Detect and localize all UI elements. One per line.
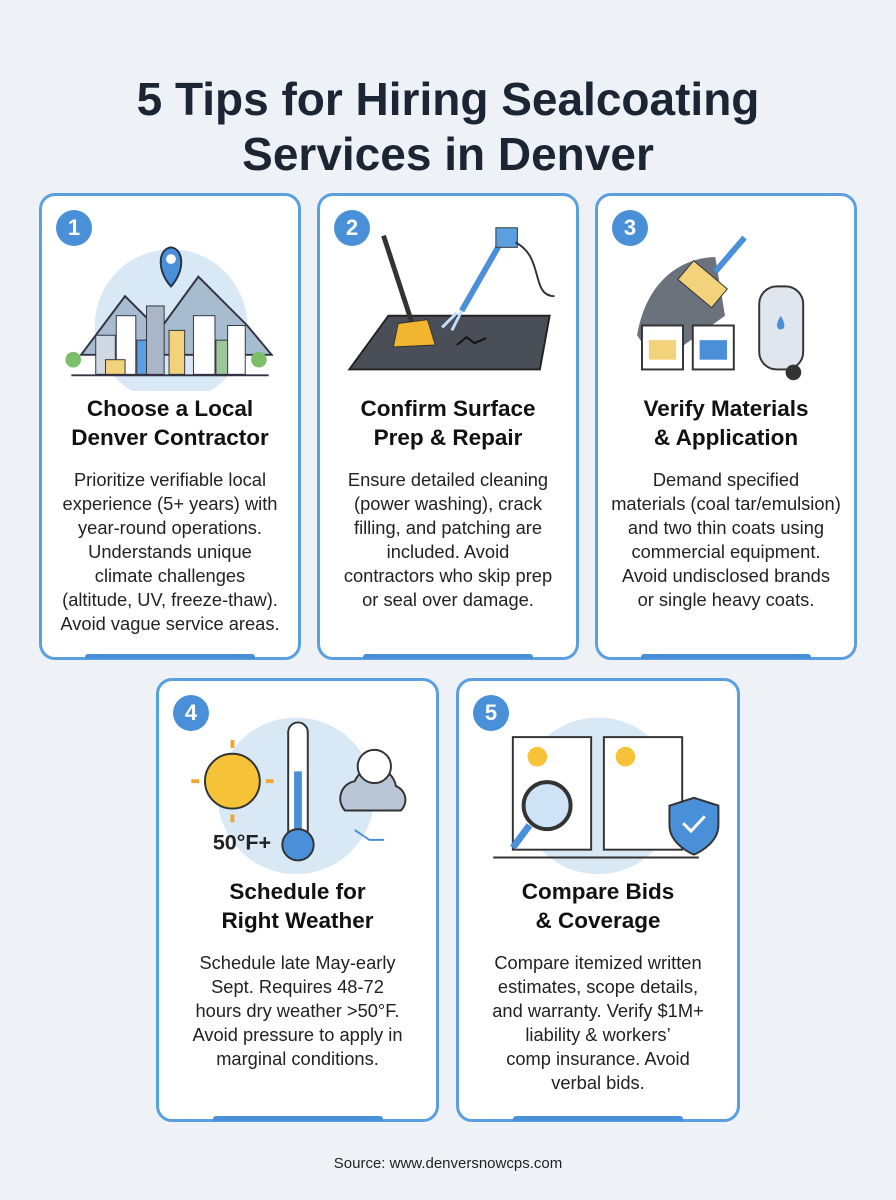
heading (522, 879, 674, 933)
badge 4 (173, 695, 209, 731)
text (611, 469, 841, 610)
text: Demand specified (653, 469, 799, 490)
heading: & Coverage (535, 908, 661, 933)
text: Avoid vague service areas. (60, 613, 280, 634)
title: Services in Denver (242, 128, 654, 180)
text: year-round operations. (78, 517, 262, 538)
text: included. Avoid (387, 541, 509, 562)
text: hours dry weather >50°F. (196, 1000, 399, 1021)
text: and warranty. Verify $1M+ (492, 1000, 704, 1021)
title: 5 Tips for Hiring Sealcoating (137, 73, 759, 125)
text: Compare itemized written (494, 952, 702, 973)
heading: Confirm Surface (360, 396, 536, 421)
text: Prioritize verifiable local (74, 469, 266, 490)
title (137, 73, 759, 180)
text: filling, and patching are (354, 517, 542, 538)
heading: Right Weather (221, 908, 374, 933)
text: commercial equipment. (632, 541, 820, 562)
heading: Compare Bids (522, 879, 674, 904)
icon: sun, thermometer, cloud (191, 718, 406, 874)
badge 1 (56, 210, 92, 246)
icon: documents, magnifier, shield (493, 718, 720, 874)
icon: broom and pressure washer (348, 227, 554, 370)
text: liability & workers’ (525, 1024, 671, 1045)
text (60, 469, 280, 634)
text: Ensure detailed cleaning (348, 469, 548, 490)
text: and two thin coats using (628, 517, 824, 538)
text: Avoid pressure to apply in (192, 1024, 403, 1045)
text: Sept. Requires 48-72 (211, 976, 384, 997)
icon: city skyline (65, 246, 274, 391)
text: materials (coal tar/emulsion) (611, 493, 841, 514)
heading: Choose a Local (87, 396, 253, 421)
badge 4: 4 (185, 700, 197, 725)
text: marginal conditions. (216, 1048, 379, 1069)
text: comp insurance. Avoid (506, 1048, 690, 1069)
icon: sun, thermometer, cloud: 50°F+ (213, 831, 271, 855)
text (192, 952, 403, 1069)
text: (power washing), crack (354, 493, 542, 514)
source footer: Source: www.denversnowcps.com (334, 1155, 562, 1172)
text: or single heavy coats. (638, 589, 814, 610)
heading: Verify Materials (643, 396, 809, 421)
text: (altitude, UV, freeze-thaw). (62, 589, 278, 610)
panel: card 5 bids (456, 678, 740, 1122)
text: estimates, scope details, (498, 976, 698, 997)
panel: card 2 surface prep (317, 193, 579, 660)
text: Understands unique (88, 541, 252, 562)
panel: card 1 local contractor (39, 193, 301, 660)
badge 1: 1 (68, 215, 80, 240)
text (492, 952, 704, 1093)
badge 3: 3 (624, 215, 636, 240)
heading (643, 396, 809, 450)
text: contractors who skip prep (344, 565, 552, 586)
heading: Denver Contractor (71, 425, 269, 450)
heading: & Application (654, 425, 798, 450)
badge 3 (612, 210, 648, 246)
text: verbal bids. (551, 1072, 645, 1093)
panel: card 3 materials (595, 193, 857, 660)
heading (221, 879, 374, 933)
badge 2: 2 (346, 215, 358, 240)
badge 5 (473, 695, 509, 731)
heading (71, 396, 269, 450)
badge 5: 5 (485, 700, 497, 725)
icon: squeegee, buckets, sprayer (637, 236, 804, 380)
text: experience (5+ years) with (63, 493, 277, 514)
panel: card 4 weather (156, 678, 439, 1122)
heading: Prep & Repair (374, 425, 522, 450)
heading: Schedule for (229, 879, 366, 904)
badge 2 (334, 210, 370, 246)
text: Schedule late May-early (199, 952, 396, 973)
heading (360, 396, 536, 450)
text: Avoid undisclosed brands (622, 565, 830, 586)
text: climate challenges (95, 565, 245, 586)
text (344, 469, 552, 610)
text: or seal over damage. (362, 589, 534, 610)
